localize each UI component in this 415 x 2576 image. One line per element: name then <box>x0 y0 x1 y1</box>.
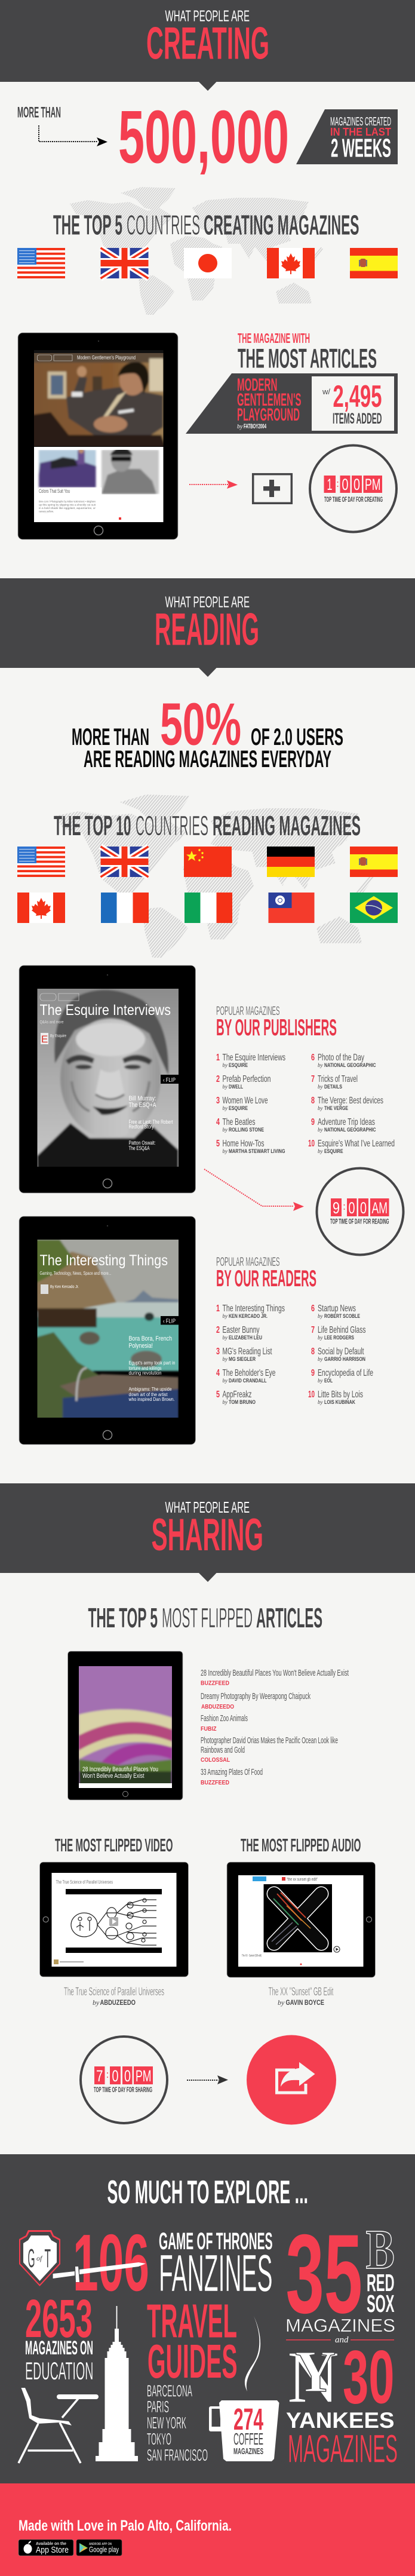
list: top 5 flipped articles: ABDUZEEDO <box>201 1704 234 1710</box>
list: readers' magazines: Life Behind Glass <box>318 1325 365 1335</box>
flag: japan <box>184 248 232 278</box>
list: publishers' magazines: ESQUIRE <box>229 1062 248 1068</box>
list: readers' magazines: Social by Default <box>318 1347 364 1357</box>
caption: audio: by <box>278 1998 285 2007</box>
list: publishers' magazines: by <box>222 1084 228 1090</box>
flag: usa <box>17 847 65 877</box>
album cover: the xx <box>264 1884 332 1952</box>
heading: the magazine with the most articles <box>238 330 377 374</box>
clock: 9:00 am top time for reading: AM <box>371 1199 388 1217</box>
list: publishers' magazines: 5 <box>216 1139 220 1149</box>
tablet: modern gentlemen's playground: in a bold shade like eggplant, aquamarine, or <box>39 507 96 510</box>
list: readers' magazines: 3 <box>216 1347 220 1357</box>
tablet: modern gentlemen's playground: Colors That Suit You <box>39 488 70 494</box>
list: publishers' magazines: 7 <box>311 1074 315 1084</box>
heading: creating: CREATING <box>146 18 269 69</box>
flag: italy <box>185 893 232 923</box>
world map: creating <box>70 187 323 315</box>
caption: video: ABDUZEEDO <box>100 2000 136 2007</box>
list: top 5 flipped articles: Dreamy Photography By Weerapong Chaipuck <box>201 1691 311 1701</box>
icon: coffee cup with 274: MAGAZINES <box>233 2446 263 2457</box>
list: cities: TOKYO <box>147 2430 171 2448</box>
list: top 5 flipped articles: Fashion Zoo Animals <box>201 1713 248 1724</box>
list: readers' magazines: 9 <box>311 1368 315 1378</box>
list: publishers' magazines: 2 <box>216 1074 220 1084</box>
list: top 5 flipped articles: FUBIZ <box>201 1726 216 1732</box>
icon: sword <box>53 2262 146 2282</box>
list: readers' magazines: EOL <box>324 1378 333 1384</box>
heading: the magazine with the most articles: THE MAGAZINE WITH <box>238 330 310 346</box>
list: publishers' magazines: 3 <box>216 1096 220 1106</box>
list: readers' magazines: Startup News <box>318 1304 356 1314</box>
clock: 1:00 pm top time for creating: 0 <box>353 476 360 493</box>
tablet: the esquire interviews: Redford Story <box>129 1124 154 1130</box>
number: 35: 35 <box>285 2211 362 2336</box>
callout: magazines created in the last 2 weeks <box>296 109 398 164</box>
icon: add plus box <box>253 474 291 503</box>
badge: app store <box>19 2540 73 2556</box>
label: red sox magazines: MAGAZINES <box>285 2315 395 2336</box>
header: reading: READING <box>155 605 259 655</box>
list: publishers' magazines: Home How-Tos <box>222 1139 264 1149</box>
list: readers' magazines: The Interesting Things <box>222 1304 285 1314</box>
badge: app store: Available on the <box>36 2542 66 2546</box>
list: publishers' magazines: Prefab Perfection <box>222 1074 271 1084</box>
heading: top 5 countries creating magazines: COUNTRIES <box>127 209 200 240</box>
list: cities: BARCELONA <box>147 2381 192 2400</box>
icon: game of thrones shield: of <box>36 2254 43 2262</box>
number: 50%: 50% <box>160 691 241 758</box>
list: publishers' magazines: ESQUIRE <box>229 1105 248 1111</box>
tablet: most flipped audio: The XX - Sunset (GB edit) <box>242 1954 262 1958</box>
caption: audio: The XX "Sunset" GB Edit <box>269 1986 334 1998</box>
tablet: the esquire interviews: Patton Oswalt: <box>129 1140 155 1146</box>
badge: google play <box>76 2540 122 2556</box>
clock: 7:00 pm top time for sharing: TOP TIME OF DAY FOR SHARING <box>94 2087 152 2094</box>
tablet: top flipped article: 28 Incredibly Beautiful Places You <box>82 1766 158 1773</box>
label: yankees magazines <box>286 2408 398 2471</box>
list: readers' magazines: Litte Bits by Lois <box>318 1390 363 1400</box>
list: cities <box>147 2381 208 2464</box>
list: publishers' magazines: by <box>222 1062 228 1068</box>
list: top 5 flipped articles: BUZZFEED <box>201 1780 229 1786</box>
icon: empire state building <box>96 2306 138 2461</box>
tablet: most flipped audio: "the xx sunset gb edit" <box>287 1876 318 1882</box>
tablet: the interesting things: The Interesting Things <box>39 1252 168 1269</box>
tablet: modern gentlemen's playground: up this spring by slipping into a shockly cut suit <box>39 504 96 507</box>
list: readers' magazines: TOM BRUNO <box>229 1399 256 1405</box>
heading: popular magazines by our publishers: POPULAR MAGAZINES <box>216 1004 279 1018</box>
heading: top 5 most flipped articles: THE TOP 5 <box>88 1602 158 1633</box>
callout: modern gentlemen's playground 2,495 items: PLAYGROUND <box>237 405 300 425</box>
flag: france <box>101 893 149 923</box>
tablet: most flipped video <box>39 1862 189 1977</box>
icon: coffee steam <box>245 2316 260 2391</box>
list: publishers' magazines: by <box>318 1062 322 1068</box>
list: readers' magazines: 8 <box>311 1347 315 1357</box>
tablet: the esquire interviews <box>19 965 196 1193</box>
tablet: the interesting things: Ambigrams: The upside <box>129 1386 172 1392</box>
tablet: modern gentlemen's playground <box>18 333 178 539</box>
list: top 5 flipped articles: 33 Amazing Plates Of Food <box>201 1767 263 1777</box>
caption: audio: GAVIN BOYCE <box>285 2000 324 2007</box>
heading: top 5 most flipped articles <box>88 1602 322 1633</box>
list: readers' magazines: Easter Bunny <box>222 1325 259 1335</box>
icon: game of thrones shield: G <box>27 2244 35 2273</box>
list: readers' magazines: by <box>318 1335 322 1341</box>
clock: 7:00 pm top time for sharing: 0 <box>124 2067 131 2085</box>
badge: google play: Google play <box>89 2545 119 2554</box>
arrow: red dotted to reading clock <box>204 1169 304 1211</box>
heading: popular magazines by our readers <box>216 1255 316 1292</box>
icon: game of thrones shield <box>19 2230 60 2286</box>
callout: modern gentlemen's playground 2,495 items: FATBOY2004 <box>244 423 266 430</box>
number: 500,000: 500,000 <box>118 96 289 179</box>
panel: so much to explore: GAME OF THRONES <box>159 2228 272 2255</box>
list: readers' magazines <box>216 1304 373 1405</box>
list: readers' magazines: Encyclopedia of Life <box>318 1368 373 1378</box>
list: publishers' magazines: ESQUIRE <box>324 1148 343 1154</box>
badge: google play: ANDROID APP ON <box>89 2543 112 2546</box>
flag: uk <box>100 847 148 877</box>
list: publishers' magazines: 6 <box>311 1053 315 1063</box>
tablet: modern gentlemen's playground: canary yellow. <box>39 510 54 513</box>
heading: top 5 most flipped articles: MOST FLIPPED <box>162 1602 253 1633</box>
header: reading <box>0 578 415 677</box>
stat: more than 50% of 2.0 users: OF 2.0 USERS <box>251 724 343 750</box>
list: readers' magazines: by <box>222 1356 228 1362</box>
clock: 9:00 am top time for reading: 0 <box>349 1199 355 1217</box>
world map: reading <box>56 795 376 958</box>
stat: travel guides: SAN FRANCISCO <box>147 2446 208 2464</box>
flag: germany <box>267 847 315 877</box>
list: publishers' magazines: by <box>318 1105 322 1111</box>
stat: 2653 magazines on education <box>25 2289 93 2385</box>
heading: top 10 countries reading magazines: COUNTRIES <box>136 810 208 841</box>
tablet: the interesting things: who inspired Dan Brown. <box>128 1396 174 1402</box>
arrow: dotted to share icon <box>187 2075 228 2084</box>
list: readers' magazines: AppFreakz <box>222 1390 252 1400</box>
list: readers' magazines: ROBERT SCOBLE <box>324 1313 360 1319</box>
tablet: the esquire interviews: E <box>41 1034 48 1045</box>
stat: more than 500,000: MORE THAN <box>17 104 61 121</box>
list: publishers' magazines: The Beatles <box>222 1117 256 1127</box>
heading: top 10 countries reading magazines: THE TOP 10 <box>54 810 131 841</box>
list: publishers' magazines: by <box>318 1148 322 1154</box>
footer text: Made with Love in Palo Alto, California. <box>19 2517 232 2534</box>
tablet: most flipped audio <box>227 1862 375 1977</box>
list: publishers' magazines: DETAILS <box>324 1084 342 1090</box>
caption: video <box>64 1986 164 2007</box>
list: readers' magazines: 7 <box>311 1325 315 1335</box>
stat: more than 50% of 2.0 users <box>72 691 343 772</box>
list: publishers' magazines: NATIONAL GEOGRAPHIC <box>324 1062 376 1068</box>
list: publishers' magazines: by <box>222 1148 228 1154</box>
arrow: dotted to number <box>39 125 107 146</box>
diagram: branching universes <box>71 1899 156 1945</box>
label: yankees magazines: YANKEES <box>286 2408 394 2433</box>
list: readers' magazines: by <box>222 1335 228 1341</box>
list: readers' magazines: LOIS KUBINAK <box>324 1399 355 1405</box>
panel: so much to explore: GUIDES <box>147 2335 238 2388</box>
tablet: most flipped video: The True Science of Parallel Universes <box>56 1879 113 1885</box>
heading: top 10 countries reading magazines <box>54 810 361 841</box>
flag: spain <box>350 847 398 877</box>
list: readers' magazines: KEN KERCADO JR. <box>229 1313 268 1319</box>
list: readers' magazines: by <box>222 1378 228 1384</box>
list: publishers' magazines: 4 <box>216 1117 220 1127</box>
kicker: what people are: WHAT PEOPLE ARE <box>165 7 250 25</box>
arrow: red dotted to add icon <box>189 480 238 489</box>
heading: popular magazines by our publishers <box>216 1004 337 1041</box>
tablet: the interesting things: down art of the artist <box>129 1391 168 1397</box>
text: THE MOST FLIPPED VIDEO <box>55 1835 173 1856</box>
icon: yankees ny logo: N <box>288 2336 339 2419</box>
flag: canada <box>17 893 65 923</box>
flag: taiwan <box>269 893 314 923</box>
callout: modern gentlemen's playground 2,495 items: MODERN <box>237 375 277 395</box>
callout: modern gentlemen's playground 2,495 items: by <box>237 424 243 430</box>
flip tab: ‹ FLIP <box>163 1077 176 1084</box>
list: cities: NEW YORK <box>147 2414 186 2432</box>
icon: coffee cup with 274: 274 <box>233 2402 263 2436</box>
tablet: the esquire interviews: The ESQ+A <box>129 1102 156 1109</box>
icon: red sox b: B <box>365 2219 395 2281</box>
list: cities: PARIS <box>147 2397 169 2416</box>
stat: travel guides <box>147 2294 238 2464</box>
badge: app store: App Store <box>36 2545 69 2555</box>
flip tab: ‹ FLIP <box>163 1318 176 1325</box>
clock: 7:00 pm top time for sharing <box>81 2037 167 2123</box>
heading: popular magazines by our readers: POPULAR MAGAZINES <box>216 1255 279 1269</box>
list: publishers' magazines: Women We Love <box>222 1096 268 1106</box>
stat: more than 50% of 2.0 users: MORE THAN <box>72 724 149 750</box>
stat: 2653 magazines on education: 2653 <box>25 2289 93 2349</box>
callout: modern gentlemen's playground 2,495 items <box>186 373 398 434</box>
tablet: the interesting things: Gaming, Technology, News, Space and more... <box>39 1271 111 1276</box>
panel: so much to explore: MAGAZINES ON <box>25 2337 93 2359</box>
list: publishers' magazines: ROLLING STONE <box>229 1127 264 1133</box>
list: publishers' magazines: 9 <box>311 1117 315 1127</box>
list: publishers' magazines: Adventure Trip Ideas <box>318 1117 375 1127</box>
icon: game of thrones shield: T <box>44 2244 51 2273</box>
tablet: top flipped article <box>68 1651 183 1800</box>
panel: so much to explore: FANZINES <box>159 2244 272 2302</box>
tablet: the interesting things: Bora Bora, French <box>129 1335 172 1342</box>
list: publishers' magazines: NATIONAL GEOGRAPHIC <box>324 1127 376 1133</box>
list: readers' magazines: The Beholder's Eye <box>222 1368 276 1378</box>
flag: brazil <box>350 893 398 923</box>
clock: 9:00 am top time for reading: 9 <box>333 1199 340 1217</box>
tablet: the interesting things <box>19 1216 196 1445</box>
clock: 1:00 pm top time for creating: 1 <box>327 476 332 493</box>
icon: coffee cup with 274: COFFEE <box>233 2430 263 2448</box>
list: top 5 flipped articles <box>201 1668 349 1786</box>
clock: 9:00 am top time for reading: 0 <box>360 1199 367 1217</box>
list: readers' magazines: by <box>318 1378 322 1384</box>
list: publishers' magazines: 8 <box>311 1096 315 1106</box>
flag: spain <box>350 248 398 278</box>
list: readers' magazines: by <box>318 1399 322 1405</box>
list: top 5 flipped articles: BUZZFEED <box>201 1680 229 1687</box>
tablet: top flipped article: Won't Believe Actually Exist <box>82 1772 145 1780</box>
tablet: the esquire interviews: The ESQ&A <box>129 1145 149 1151</box>
icon: school desk <box>19 2388 99 2463</box>
label: red sox magazines <box>285 2269 395 2336</box>
tablet: modern gentlemen's playground: Modern Gentlemen's Playground <box>77 355 136 361</box>
list: readers' magazines: ELIZABETH LEU <box>229 1335 262 1341</box>
list: publishers' magazines: by <box>318 1084 322 1090</box>
list: readers' magazines: 4 <box>216 1368 220 1378</box>
clock: 7:00 pm top time for sharing: PM <box>136 2067 152 2085</box>
list: readers' magazines: 2 <box>216 1325 220 1335</box>
list: readers' magazines: by <box>318 1356 322 1362</box>
list: readers' magazines: by <box>222 1399 228 1405</box>
flag: canada <box>267 248 315 278</box>
tablet: the esquire interviews: Q&As and more <box>39 1019 63 1025</box>
kicker: what people are: WHAT PEOPLE ARE <box>165 1498 250 1516</box>
list: top 5 flipped articles: Rainbows and Gold <box>201 1745 245 1755</box>
panel: so much to explore: TRAVEL <box>147 2294 237 2348</box>
list: readers' magazines: 6 <box>311 1304 315 1314</box>
flag: china <box>184 847 232 877</box>
callout: modern gentlemen's playground 2,495 items: 2,495 <box>333 379 382 414</box>
list: readers' magazines: 5 <box>216 1390 220 1400</box>
list: readers' magazines: DAVID CRANDALL <box>229 1378 267 1384</box>
clock: 1:00 pm top time for creating <box>310 446 396 532</box>
label: game of thrones fanzines <box>159 2228 272 2302</box>
tablet: modern gentlemen's playground: time.com / Photographs by Milan Vukmirovic • Brighten <box>39 500 96 503</box>
list: readers' magazines: 1 <box>216 1304 220 1314</box>
list: publishers' magazines: MARTHA STEWART LIVING <box>229 1148 285 1154</box>
list: readers' magazines: by <box>318 1313 322 1319</box>
tablet: the interesting things: during revolution <box>129 1370 162 1376</box>
list: readers' magazines: 10 <box>308 1390 315 1400</box>
heading: sharing: SHARING <box>152 1510 263 1560</box>
text: ARTICLES <box>256 1602 322 1633</box>
clock: 1:00 pm top time for creating: PM <box>365 476 381 493</box>
stat: more than 500,000 <box>17 96 398 179</box>
tablet: the esquire interviews: The Esquire Interviews <box>39 1002 171 1019</box>
flags: top 5 creating <box>17 248 398 278</box>
icon: yankees ny logo: Y <box>295 2338 336 2405</box>
header: creating <box>0 0 415 91</box>
list: publishers' magazines: by <box>318 1127 322 1133</box>
list: publishers' magazines: THE VERGE <box>324 1105 348 1111</box>
icon: coffee cup with 274 <box>209 2400 279 2461</box>
icon: share button <box>247 2035 336 2124</box>
callout: magazines created in the last 2 weeks: IN THE LAST <box>330 126 391 138</box>
list: readers' magazines: MG SIEGLER <box>229 1356 256 1362</box>
list: publishers' magazines: Tricks of Travel <box>318 1074 358 1084</box>
clock: 9:00 am top time for reading <box>316 1169 404 1255</box>
list: readers' magazines: LEE RODGERS <box>324 1335 354 1341</box>
list: publishers' magazines: The Esquire Interviews <box>222 1053 285 1063</box>
list: publishers' magazines: 1 <box>216 1053 220 1063</box>
list: publishers' magazines: by <box>222 1127 228 1133</box>
header: sharing <box>0 1483 415 1582</box>
list: readers' magazines: by <box>222 1313 228 1319</box>
heading: top 5 countries creating magazines <box>53 209 359 240</box>
flag: usa <box>17 248 65 278</box>
caption: video: The True Science of Parallel Universes <box>64 1986 164 1998</box>
list: readers' magazines: GARRIO HARRISON <box>324 1356 365 1362</box>
tablet: the interesting things: By Ken Kercado Jr. <box>50 1284 79 1289</box>
tablet: the esquire interviews: By Esquire <box>50 1033 66 1038</box>
panel: so much to explore: EDUCATION <box>25 2357 93 2385</box>
heading: top 5 countries creating magazines: THE TOP 5 <box>53 209 122 240</box>
kicker: what people are: WHAT PEOPLE ARE <box>165 593 250 611</box>
flip tab <box>161 1316 179 1325</box>
tablet: the esquire interviews: Bill Murray: <box>129 1095 156 1102</box>
tablet: the interesting things: Polynesia! <box>129 1342 153 1350</box>
list: publishers' magazines <box>216 1053 395 1154</box>
flags: top 10 reading <box>17 847 398 923</box>
list: publishers' magazines: by <box>222 1105 228 1111</box>
clock: 1:00 pm top time for creating: 0 <box>342 476 349 493</box>
callout: modern gentlemen's playground 2,495 items: w/ <box>322 387 330 396</box>
panel: so much to explore <box>0 2154 415 2483</box>
number: 106: 106 <box>73 2218 149 2308</box>
list: publishers' magazines: Photo of the Day <box>318 1053 364 1063</box>
tablet: the interesting things: torture and killings <box>129 1365 161 1371</box>
caption: audio <box>269 1986 334 2007</box>
list: readers' magazines: MG's Reading List <box>222 1347 272 1357</box>
flip tab <box>161 1075 179 1084</box>
callout: modern gentlemen's playground 2,495 items: GENTLEMEN'S <box>237 390 301 410</box>
tablet: the interesting things: Egypt's army took part in <box>129 1360 176 1366</box>
footer <box>0 2483 415 2576</box>
list: top 5 flipped articles: COLOSSAL <box>201 1757 230 1764</box>
list: publishers' magazines: DWELL <box>229 1084 243 1090</box>
flag: uk <box>100 248 148 278</box>
tablet: the esquire interviews: Free at Last: The Robert <box>129 1119 173 1125</box>
caption: video: by <box>93 1998 100 2007</box>
clock: 7:00 pm top time for sharing: 0 <box>112 2067 118 2085</box>
clock: 7:00 pm top time for sharing: 7 <box>96 2067 103 2085</box>
list: publishers' magazines: 10 <box>308 1139 315 1149</box>
divider: and: and <box>335 2335 349 2345</box>
